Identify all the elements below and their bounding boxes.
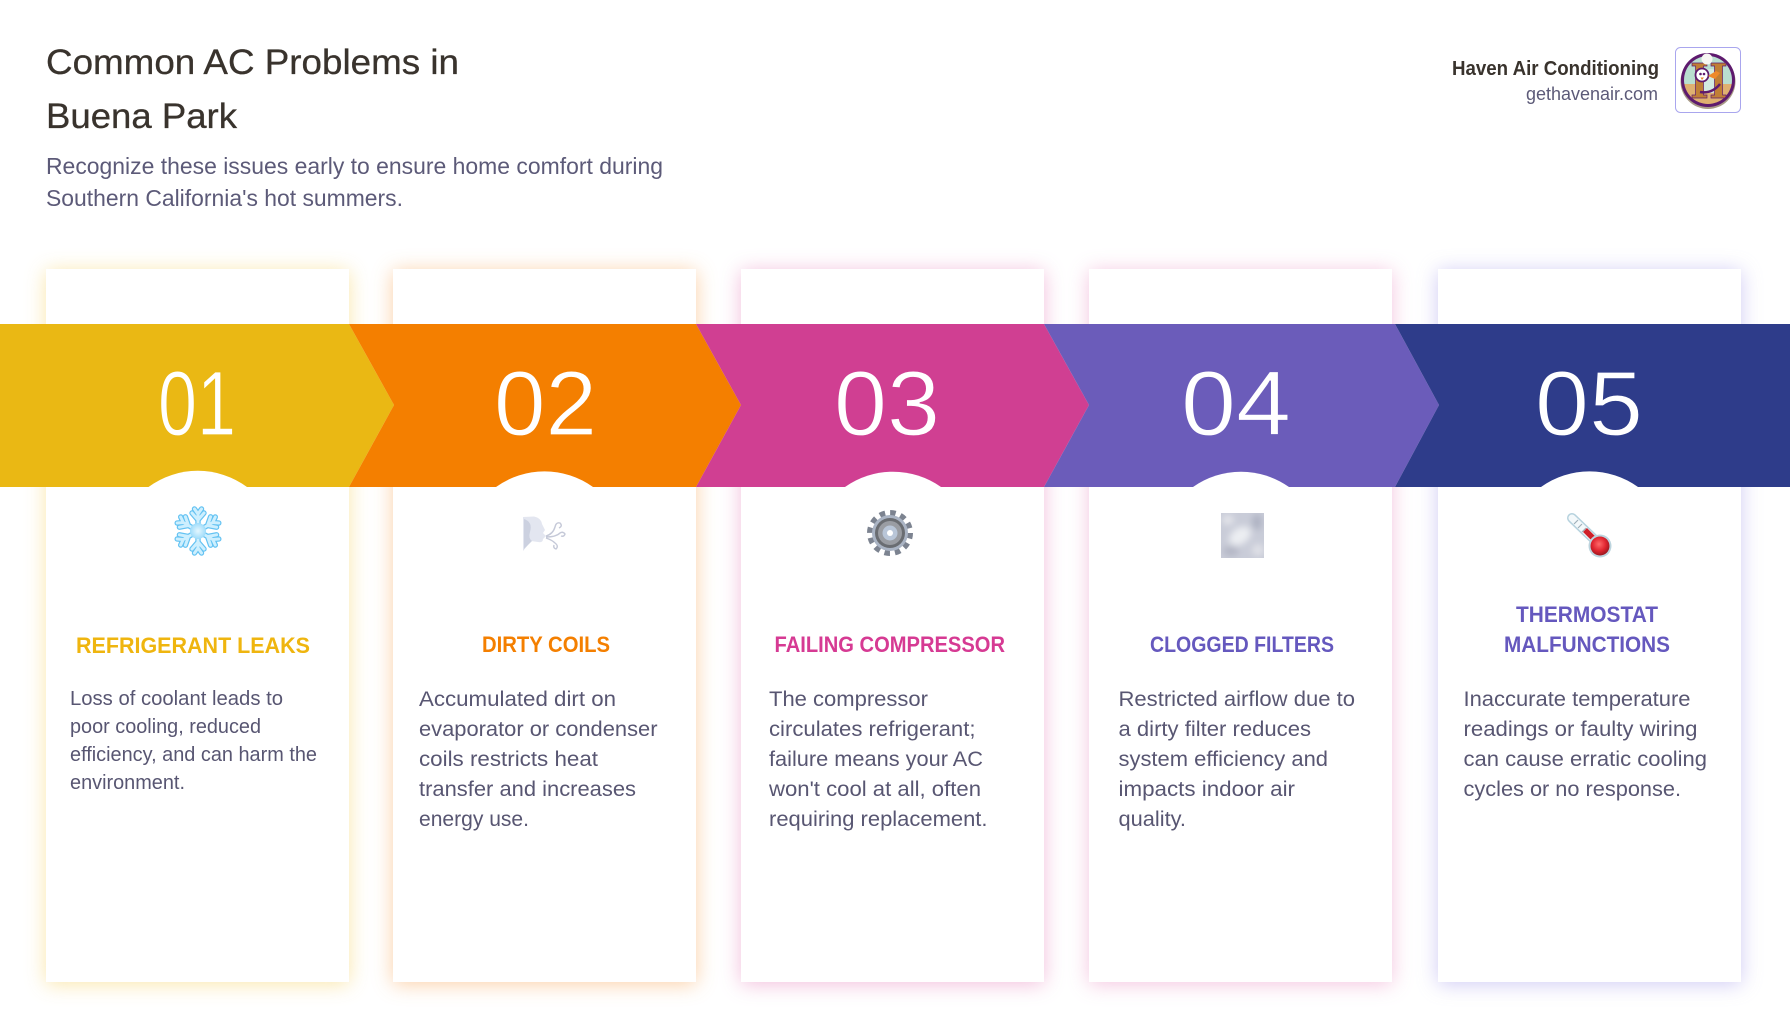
- body text: The compressor: [769, 687, 928, 711]
- body text: Accumulated dirt on: [419, 687, 616, 711]
- body text: energy use.: [419, 807, 529, 831]
- body text: [70, 688, 317, 794]
- body text: readings or faulty wiring: [1464, 717, 1698, 741]
- body text: circulates refrigerant;: [769, 717, 976, 741]
- brand name and website: [1452, 58, 1659, 104]
- body text: [1118, 687, 1355, 831]
- step 04 arrow: [1044, 324, 1439, 487]
- icon: dirty filter swatch: [1221, 513, 1264, 558]
- step 04 arrow: 04: [1181, 353, 1291, 455]
- chevron band: [0, 324, 1790, 487]
- body text: efficiency, and can harm the: [70, 744, 317, 766]
- icon: snowflake: [176, 509, 220, 553]
- panel: clogged filters: [1089, 269, 1392, 982]
- brand name and website: gethavenair.com: [1526, 84, 1658, 104]
- body text: requiring replacement.: [769, 807, 988, 831]
- panel: failing compressor: [741, 269, 1044, 982]
- body text: impacts indoor air: [1118, 777, 1295, 801]
- panel: refrigerant leaks: [46, 269, 349, 982]
- body text: failure means your AC: [769, 747, 983, 771]
- step 03 arrow: [696, 324, 1089, 487]
- heading: THERMOSTAT: [1516, 602, 1659, 627]
- step 03 arrow: 03: [834, 353, 940, 455]
- body text: coils restricts heat: [419, 747, 598, 771]
- subtitle: Southern California's hot summers.: [46, 185, 403, 211]
- heading: FAILING COMPRESSOR: [774, 632, 1005, 657]
- step 05 arrow: 05: [1535, 353, 1643, 455]
- body text: Loss of coolant leads to: [70, 688, 283, 710]
- step 02 arrow: [349, 324, 741, 487]
- panel: dirty coils: [393, 269, 696, 982]
- body text: transfer and increases: [419, 777, 636, 801]
- panel: thermostat malfunctions: [1438, 269, 1741, 982]
- title: Buena Park: [46, 97, 238, 136]
- heading: CLOGGED FILTERS: [1150, 632, 1334, 657]
- icon: blowing face: [523, 516, 565, 551]
- body text: environment.: [70, 772, 185, 794]
- body text: won't cool at all, often: [768, 777, 981, 801]
- subtitle: Recognize these issues early to ensure home comfort during: [46, 153, 663, 179]
- body text: [419, 687, 658, 831]
- subtitle: [46, 153, 663, 211]
- step 02 arrow: 02: [494, 353, 597, 455]
- body text: evaporator or condenser: [419, 717, 658, 741]
- brand name and website: Haven Air Conditioning: [1452, 58, 1659, 80]
- body text: quality.: [1118, 807, 1186, 831]
- body text: a dirty filter reduces: [1118, 717, 1311, 741]
- title: [46, 43, 459, 136]
- body text: poor cooling, reduced: [70, 716, 261, 738]
- heading: REFRIGERANT LEAKS: [76, 633, 310, 658]
- body text: cycles or no response.: [1464, 777, 1681, 801]
- body text: Inaccurate temperature: [1464, 687, 1690, 711]
- step 01 arrow: 01: [158, 353, 236, 455]
- body text: Restricted airflow due to: [1118, 687, 1355, 711]
- icon: gear: [870, 513, 910, 553]
- heading: [1504, 602, 1670, 657]
- logo badge: [1676, 48, 1740, 112]
- body text: [1464, 687, 1707, 801]
- body text: system efficiency and: [1118, 747, 1328, 771]
- step 05 arrow: [1395, 324, 1790, 487]
- body text: can cause erratic cooling: [1464, 747, 1707, 771]
- heading: MALFUNCTIONS: [1504, 632, 1670, 657]
- body text: [768, 687, 988, 831]
- title: Common AC Problems in: [46, 43, 459, 82]
- icon: thermometer: [1572, 518, 1612, 558]
- step 01 arrow: [0, 324, 394, 487]
- heading: DIRTY COILS: [482, 632, 610, 657]
